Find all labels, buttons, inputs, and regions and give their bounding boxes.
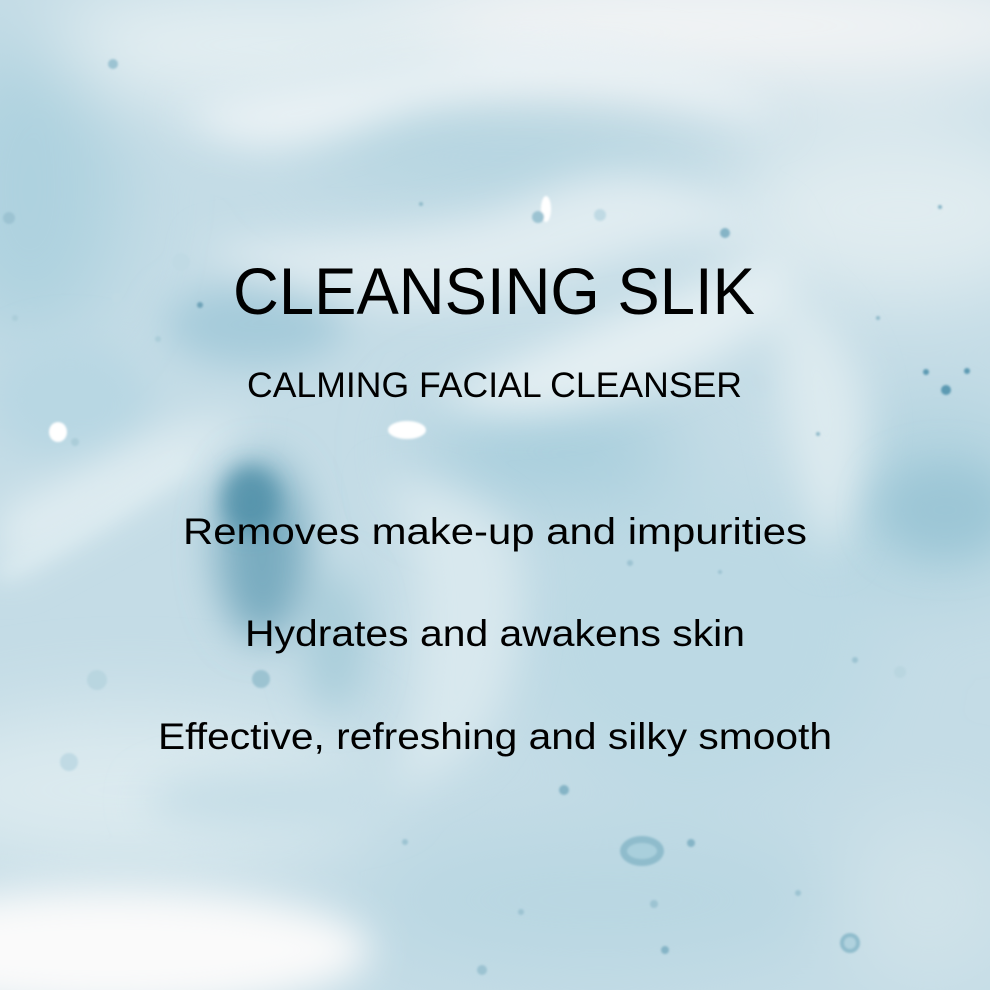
subtitle: CALMING FACIAL CLEANSER [247, 366, 742, 405]
benefit: removes make-up: Removes make-up and impurities [183, 511, 807, 552]
benefit: hydrates: Hydrates and awakens skin [245, 613, 745, 654]
benefit: effective: Effective, refreshing and silky smooth [158, 716, 832, 757]
title: CLEANSING SLIK [233, 254, 755, 328]
